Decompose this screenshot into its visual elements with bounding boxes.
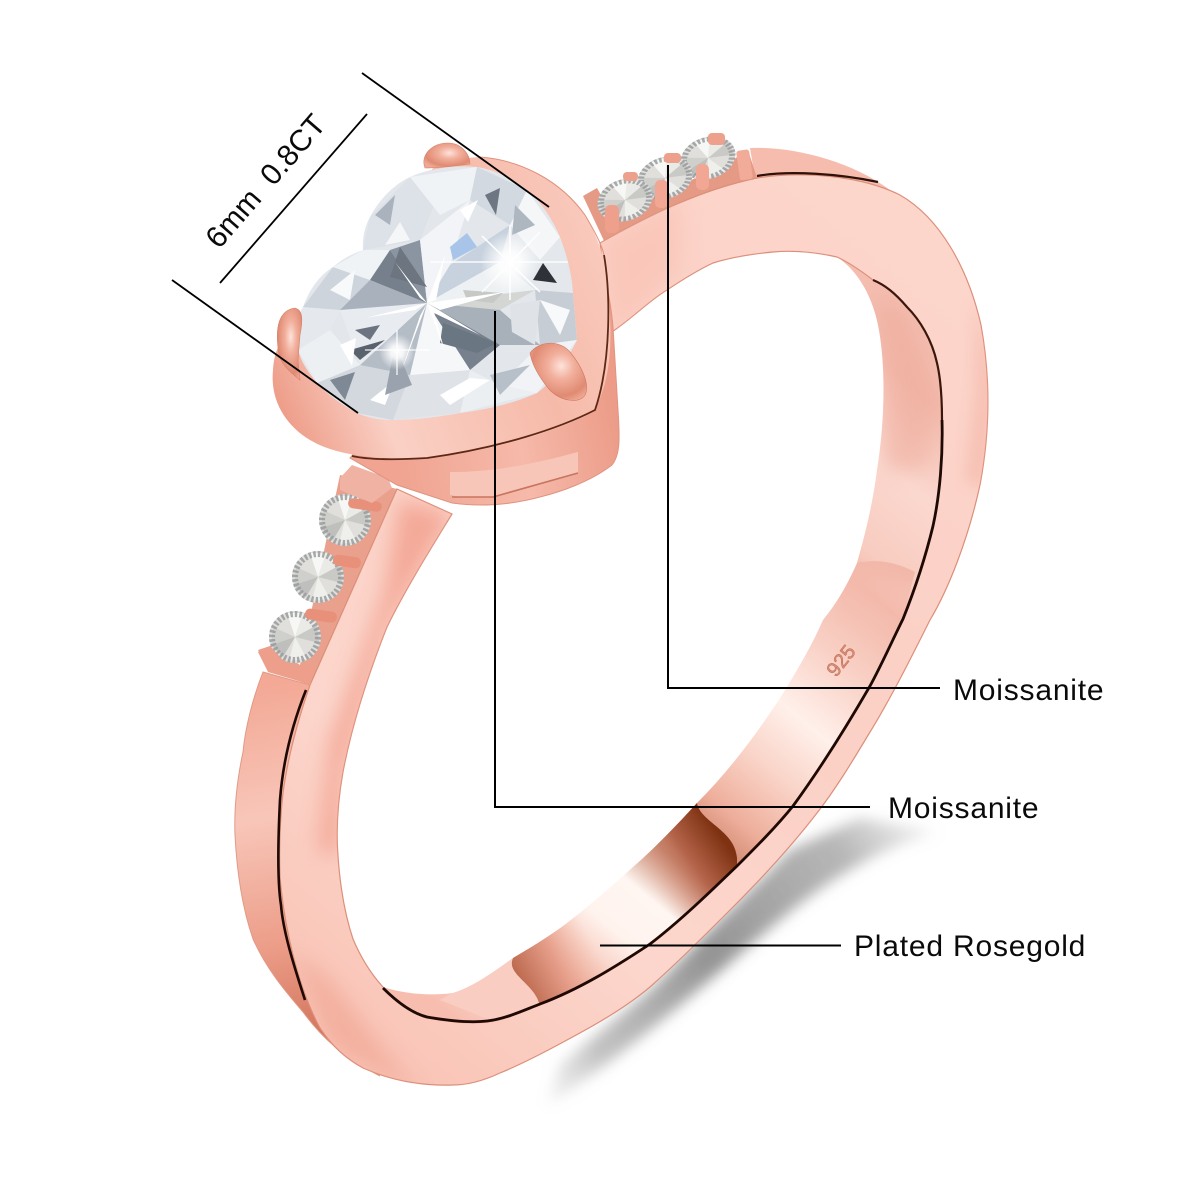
- front face of band: [280, 175, 998, 1095]
- callout: main stone Moissanite: [495, 311, 1039, 825]
- left seam between rails: [278, 690, 306, 1000]
- upper diamond channel: [583, 150, 757, 243]
- lower accent stones: [258, 465, 392, 685]
- inner seam line: [383, 280, 942, 1022]
- callout: accent stones Moissanite: [668, 165, 1104, 707]
- callout: main stone Moissanite: Moissanite: [888, 792, 1039, 825]
- heart setting gallery: [350, 180, 619, 505]
- inner surface of band: [383, 257, 942, 1024]
- upper band top edge shadow: [757, 173, 878, 182]
- callout: Plated Rosegold: Plated Rosegold: [854, 930, 1086, 963]
- callout: accent stones Moissanite: Moissanite: [953, 674, 1104, 707]
- heart-cut main moissanite: [299, 166, 577, 420]
- prong: right: [530, 343, 587, 400]
- lower diamond channel: [258, 475, 397, 685]
- dimension: 6mm 0.8CT: [172, 73, 549, 413]
- upper accent stones: [592, 130, 753, 233]
- engraving: 925: 925: [823, 641, 860, 681]
- back rim: upper right band: [750, 148, 890, 190]
- back rim: outer left band: [235, 672, 380, 1076]
- heart bezel: [273, 157, 610, 459]
- prong: top: [424, 143, 470, 168]
- ring infographic: [172, 72, 1102, 1097]
- ground shadow: [548, 818, 938, 1105]
- prong: left: [277, 308, 302, 380]
- dimension: 6mm 0.8CT: 6mm 0.8CT: [199, 108, 333, 255]
- heart facets fine detail: [330, 188, 570, 405]
